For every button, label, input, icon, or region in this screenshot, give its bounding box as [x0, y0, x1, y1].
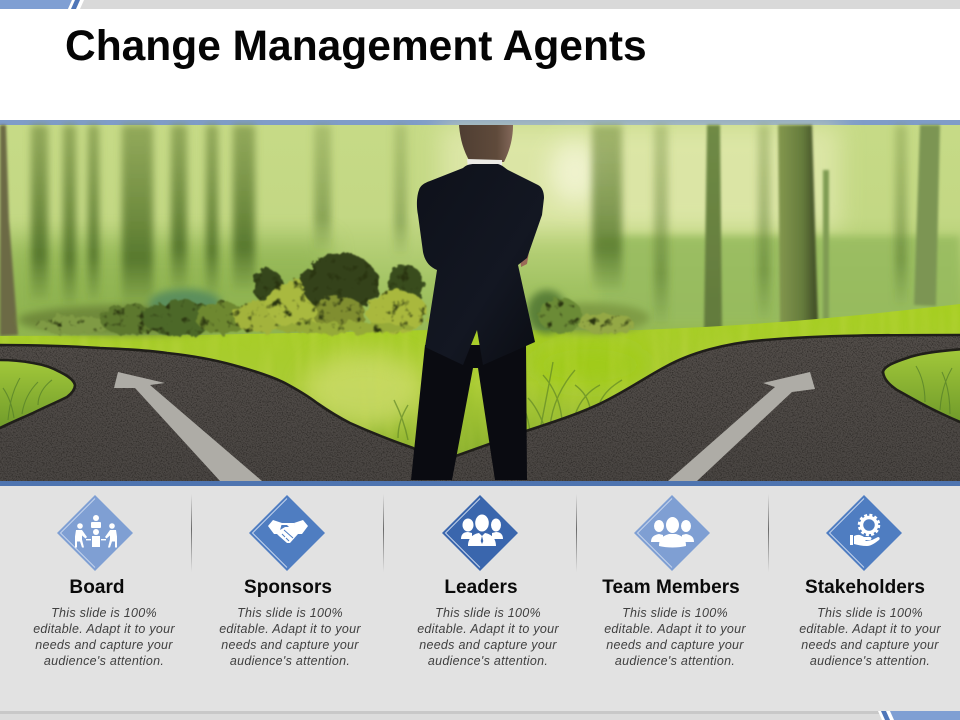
- text: Sponsors description: [219, 606, 361, 668]
- top decorative bar: [0, 0, 960, 9]
- heading: Leaders: Leaders: [444, 577, 518, 598]
- text: Leaders description: audience's attention.: [428, 654, 548, 668]
- text: Team Members description: needs and capture your: [606, 638, 744, 652]
- text: Sponsors description: editable. Adapt it to your: [219, 622, 361, 636]
- right grass island: [883, 349, 960, 424]
- text: Leaders description: [417, 606, 559, 668]
- column divider 2: [383, 494, 384, 572]
- bushes: [18, 253, 650, 336]
- column divider 4: [768, 494, 769, 572]
- grey content panel: [0, 486, 960, 711]
- text: Stakeholders description: needs and capture your: [801, 638, 939, 652]
- heading: Board: Board: [69, 577, 125, 598]
- icon: team members diamond: [634, 495, 710, 571]
- text: Leaders description: This slide is 100%: [435, 606, 541, 620]
- heading: Sponsors: Sponsors: [244, 577, 332, 598]
- left grass island: [0, 360, 75, 430]
- road surface: [0, 335, 960, 490]
- text: Team Members description: audience's attention.: [615, 654, 735, 668]
- text: Sponsors description: This slide is 100%: [237, 606, 343, 620]
- man in dark suit seen from behind: [411, 125, 544, 480]
- text: Board description: This slide is 100%: [51, 606, 157, 620]
- blue rule below photo: [0, 481, 960, 486]
- text: Sponsors description: audience's attention.: [230, 654, 350, 668]
- text: Team Members description: [604, 606, 746, 668]
- right road arrow: [668, 372, 815, 481]
- text: Team Members description: This slide is 100%: [622, 606, 728, 620]
- icon: stakeholders hand and gear diamond: [826, 495, 902, 571]
- text: Stakeholders description: [799, 606, 941, 668]
- text: Team Members description: editable. Adapt it to your: [604, 622, 746, 636]
- text: Stakeholders description: editable. Adapt it to your: [799, 622, 941, 636]
- heading: Team Members: Team Members: [602, 577, 740, 598]
- blue rule above photo: [0, 120, 960, 125]
- hero photo: man at a forked road: [0, 120, 960, 486]
- heading: Stakeholders: Stakeholders: [805, 577, 925, 598]
- text: Stakeholders description: audience's attention.: [810, 654, 930, 668]
- text: Leaders description: editable. Adapt it to your: [417, 622, 559, 636]
- icon: leaders group diamond: [442, 495, 518, 571]
- column divider 1: [191, 494, 192, 572]
- text: Leaders description: needs and capture your: [419, 638, 557, 652]
- text: Sponsors description: needs and capture your: [221, 638, 359, 652]
- bottom decorative bar: [0, 711, 960, 720]
- text: Board description: audience's attention.: [44, 654, 164, 668]
- text: Board description: [33, 606, 175, 668]
- foreground tree trunks: [0, 125, 940, 336]
- title: Change Management Agents: [65, 23, 647, 70]
- text: Stakeholders description: This slide is 100%: [817, 606, 923, 620]
- text: Board description: editable. Adapt it to your: [33, 622, 175, 636]
- grass blades by the road: [394, 362, 622, 440]
- text: Board description: needs and capture your: [35, 638, 173, 652]
- left road arrow: [114, 372, 262, 481]
- column divider 3: [576, 494, 577, 572]
- icon: handshake diamond: [249, 495, 325, 571]
- misty forest background: [0, 125, 960, 355]
- far grass: [0, 304, 960, 454]
- icon: board meeting diamond: [57, 495, 133, 571]
